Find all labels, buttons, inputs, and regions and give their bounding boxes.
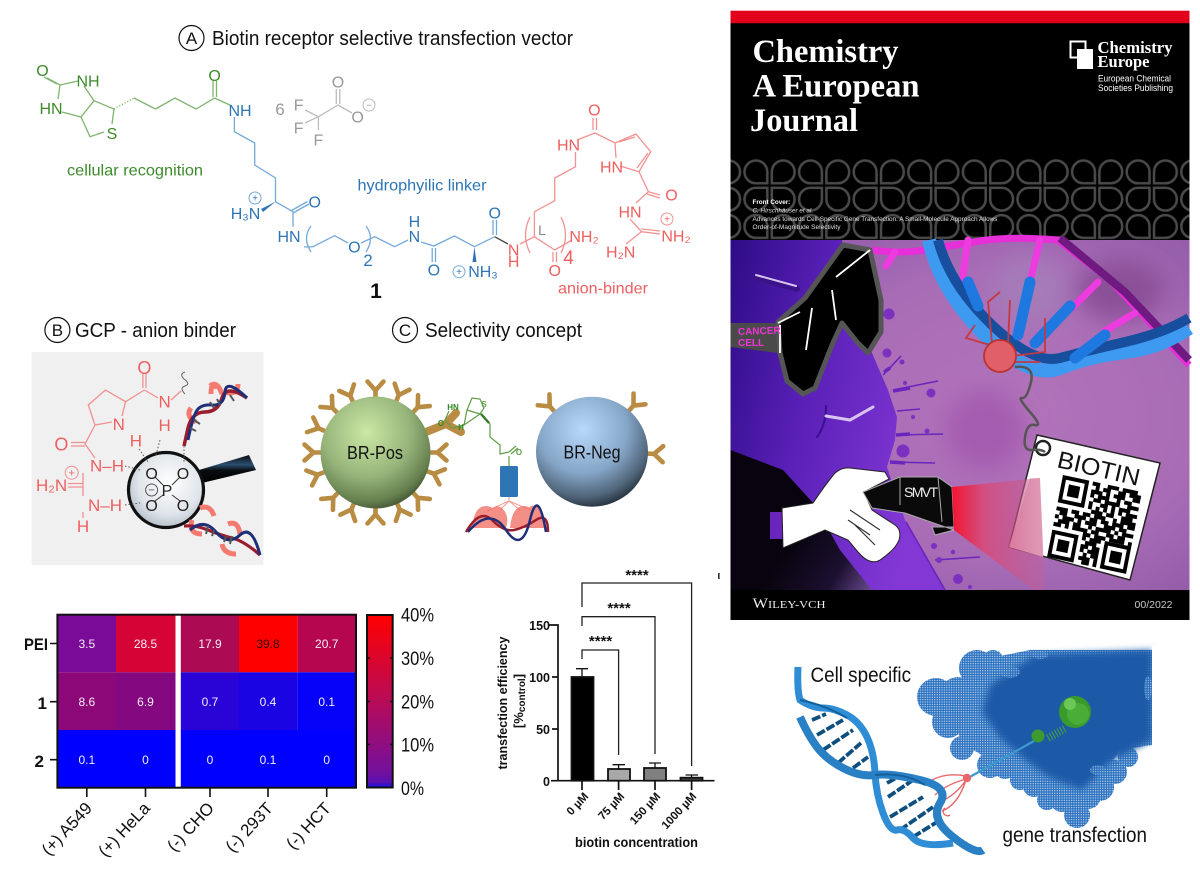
cover artwork xyxy=(730,238,1190,590)
heat map values: 17.9 xyxy=(198,637,222,651)
heat map values: 3.5 xyxy=(78,637,95,651)
molecule: hydrophilic linker: O xyxy=(308,194,321,212)
magnifier lens with phosphate: O xyxy=(177,498,189,515)
molecule: hydrophilic linker: 2 xyxy=(363,251,373,270)
anion binder structure: H xyxy=(158,416,171,435)
molecule: anion binder: + xyxy=(664,214,670,226)
anion binder with DNA xyxy=(466,497,548,540)
heat map values: 0 xyxy=(323,753,330,767)
heat map values: 0.1 xyxy=(78,753,95,767)
sphere BR-Neg: BR-Neg xyxy=(564,442,620,462)
biotin conjugate: HN xyxy=(447,403,459,412)
green biotin pocket xyxy=(1032,696,1091,742)
counterion: trifluoroacetate: F xyxy=(314,132,324,150)
molecule: anion binder: NH₂ xyxy=(569,229,599,246)
molecule: biotin recognition unit xyxy=(36,63,232,180)
colour scale: 20% xyxy=(401,692,434,714)
journal title: Chemistry xyxy=(752,34,899,70)
biotin tag: BIOTIN xyxy=(1055,447,1143,492)
publisher logo xyxy=(1070,38,1173,93)
hydrogen bonds xyxy=(125,440,184,505)
anion binder structure xyxy=(36,358,188,536)
counterion: trifluoroacetate: F xyxy=(294,98,304,114)
heat map cells xyxy=(57,615,356,788)
journal title: Journal xyxy=(750,103,858,139)
molecule: anion binder: HN xyxy=(557,138,580,154)
heat map xyxy=(24,606,434,860)
molecule: anion binder: 4 xyxy=(563,248,574,269)
heat map values: 39.8 xyxy=(256,637,280,651)
anion binder structure: O xyxy=(54,434,68,454)
cell spikes and dots xyxy=(882,308,980,590)
row labels: 2 xyxy=(35,752,44,771)
front cover caption: Order-of-Magnitude Selectivity xyxy=(752,224,841,231)
molecule: biotin recognition unit: O xyxy=(36,63,49,80)
sphere BR-Pos: BR-Pos xyxy=(347,443,403,463)
y tick labels: 50 xyxy=(536,723,550,737)
molecule: hydrophilic linker: N xyxy=(409,229,420,246)
molecule: biotin recognition unit: O xyxy=(208,68,221,85)
front cover caption: Advances towards Cell-Specific Gene Transfection: A Small-Molecule Approach Allows xyxy=(752,216,998,223)
molecule: hydrophilic linker: + xyxy=(252,194,258,204)
molecule: anion binder xyxy=(495,102,691,298)
front cover caption: Front Cover: xyxy=(752,199,790,206)
magnifier handle xyxy=(199,455,256,483)
counterion: trifluoroacetate: 6 xyxy=(275,100,285,119)
heat map values: 0.1 xyxy=(318,695,335,709)
x tick labels: 150 µM xyxy=(628,791,663,827)
small mark xyxy=(718,573,720,579)
artwork background xyxy=(730,240,1190,590)
sunglasses: CANCER xyxy=(738,325,782,338)
x tick labels: 1000 µM xyxy=(660,791,699,832)
heat map values xyxy=(78,637,339,767)
biotin conjugate: O xyxy=(516,448,522,457)
publisher logo: Chemistry xyxy=(1098,38,1173,57)
molecule: hydrophilic linker: HN xyxy=(277,229,301,246)
colour scale: 10% xyxy=(401,736,434,756)
red molecule on DNA xyxy=(966,292,1045,372)
molecule: anion binder: HN xyxy=(618,204,642,222)
BR-Neg receptors xyxy=(538,394,663,462)
gene transfection graphic xyxy=(798,645,1166,851)
molecule: hydrophilic linker: H₃N xyxy=(231,206,260,223)
caption: gene transfection: gene transfection xyxy=(1002,823,1147,847)
biotin conjugate: O xyxy=(438,419,444,428)
heat map values: 0.1 xyxy=(260,753,277,767)
significance stars: **** xyxy=(607,600,631,617)
heat map values: 0.4 xyxy=(260,695,277,709)
colour scale xyxy=(367,606,434,800)
anion binder structure: H₂N xyxy=(36,476,67,495)
column labels xyxy=(38,798,335,860)
row labels: 1 xyxy=(38,694,47,713)
heading A: Biotin receptor selective transfection vector xyxy=(212,27,573,50)
anion binder structure: O xyxy=(137,358,151,378)
heading B: B xyxy=(52,321,63,340)
counterion: trifluoroacetate: O xyxy=(332,74,344,92)
biotin conjugate xyxy=(438,398,522,466)
column labels: (-) CHO xyxy=(163,799,218,855)
colour scale: 0% xyxy=(401,779,424,800)
BR-Pos receptors xyxy=(304,382,461,524)
molecule: hydrophilic linker: NH xyxy=(228,103,252,120)
axes xyxy=(549,625,714,790)
x tick labels: 0 µM xyxy=(565,791,591,818)
grey background xyxy=(32,352,264,565)
molecule: biotin recognition unit: cellular recognition xyxy=(67,162,203,180)
x axis title: biotin concentration xyxy=(575,835,698,850)
counterion: trifluoroacetate xyxy=(275,74,375,150)
magnifier lens with phosphate: P xyxy=(162,483,172,500)
y tick labels xyxy=(529,619,550,789)
scanner xyxy=(863,477,954,535)
y tick labels: 100 xyxy=(529,671,550,685)
suit xyxy=(730,450,872,590)
molecule: biotin recognition unit: S xyxy=(107,126,117,143)
front cover caption xyxy=(752,199,998,231)
sphere BR-Pos xyxy=(320,396,430,508)
molecule: hydrophilic linker: hydrophyilic linker xyxy=(358,178,487,194)
caption: cell specific: Cell specific xyxy=(810,663,911,687)
heading C: C xyxy=(399,321,411,340)
y axis label: control xyxy=(517,678,528,712)
anion binder structure: N–H xyxy=(88,496,122,515)
column labels: (+) A549 xyxy=(38,799,96,859)
sunglasses: CELL xyxy=(738,338,764,349)
protein speckle patches xyxy=(1000,651,1152,775)
DNA helix xyxy=(798,667,983,851)
molecule: biotin recognition unit: NH xyxy=(76,74,100,90)
x tick labels: 75 µM xyxy=(596,791,627,823)
counterion: trifluoroacetate: O xyxy=(351,110,364,126)
heat map values: 0 xyxy=(142,753,149,767)
molecule: anion binder: N xyxy=(508,242,519,260)
molecule: hydrophilic linker: O xyxy=(348,240,361,256)
sunglasses xyxy=(730,245,881,394)
journal title: A European xyxy=(752,68,920,104)
bar chart: biotin competition xyxy=(495,567,720,850)
panel A: biotin receptor selective transfection vector xyxy=(36,26,691,303)
red top bar xyxy=(730,11,1190,23)
column labels: (-) 293T xyxy=(222,799,277,856)
significance stars: **** xyxy=(589,633,612,650)
biotin conjugate: H xyxy=(458,423,464,432)
magnifier lens with phosphate: − xyxy=(148,484,155,496)
counterion: trifluoroacetate: F xyxy=(294,120,304,138)
publisher logo: European Chemical xyxy=(1098,74,1171,84)
molecule: anion binder: NH₂ xyxy=(661,228,691,246)
stereo label L: L xyxy=(538,222,546,238)
anion binder structure: N xyxy=(113,415,125,434)
y axis label: [% xyxy=(511,712,526,728)
biotin conjugate: S xyxy=(481,400,487,409)
colour scale: 30% xyxy=(401,649,434,670)
anion binder structure: N–H xyxy=(90,456,124,476)
molecule: hydrophilic linker: O xyxy=(488,206,501,222)
y axis label xyxy=(495,636,528,770)
anion binder structure: + xyxy=(68,468,75,480)
protein surface xyxy=(917,650,1152,828)
y tick labels: 0 xyxy=(543,775,550,789)
molecule: anion binder: H₂N xyxy=(606,244,635,262)
column labels: (+) HeLa xyxy=(95,798,154,860)
DNA with binder, top xyxy=(184,384,247,446)
cell face marks xyxy=(756,275,873,437)
biotin tag xyxy=(1009,435,1160,580)
scanner: SMVT xyxy=(904,484,938,500)
magnifier lens with phosphate: O xyxy=(145,498,158,515)
publisher footer xyxy=(752,596,1173,612)
cover black background xyxy=(730,23,1190,620)
molecule: hydrophilic linker: + xyxy=(456,267,462,278)
molecule: anion binder: anion-binder xyxy=(558,280,649,298)
molecule: hydrophilic linker: O xyxy=(428,262,440,280)
red laser beam xyxy=(952,478,1045,590)
anion binder structure: N xyxy=(158,392,171,412)
magnifier lens with phosphate: O xyxy=(145,466,158,483)
pattern band xyxy=(730,159,1190,240)
publisher footer: WILEY-VCH xyxy=(752,596,826,612)
heat map values: 28.5 xyxy=(134,637,158,651)
protein dark core xyxy=(982,650,1152,790)
molecule: anion binder: HN xyxy=(600,160,623,176)
front cover caption: C. Hirschhäuser et al. xyxy=(752,208,813,214)
heat map values: 0.7 xyxy=(202,695,219,709)
publisher logo: Europe xyxy=(1098,52,1150,71)
molecule: anion binder: O xyxy=(665,188,678,204)
molecule: biotin recognition unit: HN xyxy=(39,101,63,118)
background tone blobs xyxy=(945,255,1165,470)
publisher logo: Societies Publishing xyxy=(1098,83,1173,93)
significance brackets xyxy=(582,583,692,766)
magnifier lens with phosphate xyxy=(128,452,204,528)
x tick labels xyxy=(565,791,699,832)
molecule: anion binder: O xyxy=(588,102,601,120)
heat map values: 20.7 xyxy=(315,637,339,651)
row labels xyxy=(24,635,327,797)
row labels: PEI xyxy=(24,635,48,654)
bars with error bars xyxy=(572,669,702,781)
significance stars: **** xyxy=(625,567,649,584)
heat map values: 6.9 xyxy=(137,695,154,709)
publisher footer: 00/2022 xyxy=(1135,599,1173,611)
molecule: anion binder: O xyxy=(548,263,561,280)
linker stick xyxy=(968,741,1034,778)
sphere BR-Neg xyxy=(536,397,648,507)
white edge of image crop xyxy=(1152,645,1166,755)
anion binder structure: H xyxy=(77,517,89,536)
grey linker string xyxy=(1015,367,1045,452)
heat map values: 8.6 xyxy=(78,695,95,709)
molecule: anion binder: H xyxy=(508,254,519,271)
DNA with binder, bottom xyxy=(184,507,260,555)
purple cuff xyxy=(770,512,783,539)
blue linker block xyxy=(500,466,518,497)
counterion: trifluoroacetate: − xyxy=(366,100,372,112)
molecule: hydrophilic linker: H xyxy=(409,214,420,231)
heading A: A xyxy=(186,29,198,48)
DNA blue backbone xyxy=(929,240,1189,371)
molecule: hydrophilic linker: NH₃ xyxy=(468,264,498,281)
y axis label: transfection efficiency xyxy=(495,636,510,770)
heading B: GCP - anion binder xyxy=(75,319,236,342)
DNA magenta backbone xyxy=(872,238,1189,365)
heading C: Selectivity concept xyxy=(425,319,582,342)
heat map values: 0 xyxy=(207,753,214,767)
red binder arms xyxy=(925,774,970,816)
cell body xyxy=(730,240,945,590)
y tick labels: 150 xyxy=(529,619,550,633)
panel C: selectivity concept xyxy=(304,318,663,540)
QR code xyxy=(1047,475,1142,574)
molecule: hydrophilic linker xyxy=(228,103,501,281)
column labels: (-) HCT xyxy=(282,799,335,853)
journal title xyxy=(750,34,920,139)
y axis label: ] xyxy=(511,674,526,678)
white glove xyxy=(782,468,900,562)
colour scale: 40% xyxy=(401,606,434,626)
journal cover xyxy=(730,11,1190,620)
panel B: GCP anion binder xyxy=(32,318,264,565)
compound number 1: 1 xyxy=(370,280,382,303)
significance stars xyxy=(589,567,649,650)
anion binder structure: H xyxy=(130,432,142,450)
magnifier lens with phosphate: O xyxy=(177,466,189,483)
